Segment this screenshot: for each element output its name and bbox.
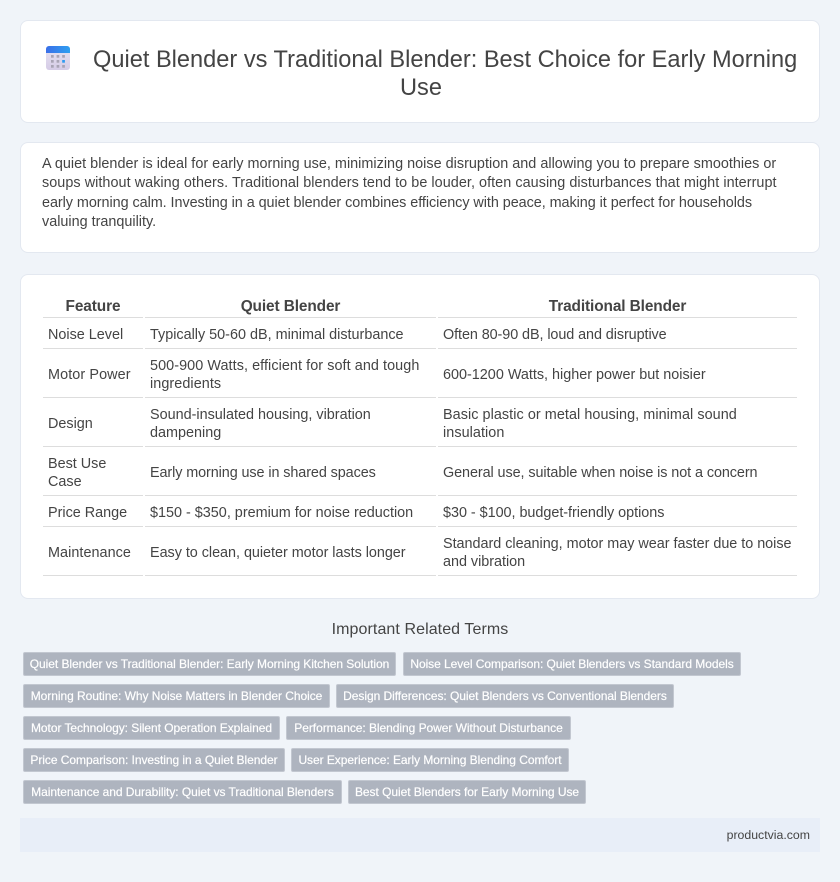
tags: related terms: Quiet Blender vs Traditional Blender: Early Morning Kitchen Solution xyxy=(30,657,389,671)
text block: description: valuing tranquility. xyxy=(42,214,156,230)
title: Use xyxy=(400,75,442,101)
row: price range: $30 - $100, budget-friendly options xyxy=(443,505,664,521)
row: best use case: General use, suitable when noise is not a concern xyxy=(443,465,757,481)
panel: comparison table xyxy=(20,274,820,599)
row: design: insulation xyxy=(443,425,504,441)
tags: related terms: Design Differences: Quiet Blenders vs Conventional Blenders xyxy=(343,689,667,703)
tags: related terms: Price Comparison: Investing in a Quiet Blender xyxy=(30,753,278,767)
row: best use case xyxy=(48,456,757,490)
heading: related terms: Important Related Terms xyxy=(332,621,508,638)
row: noise level xyxy=(48,327,667,343)
table header xyxy=(66,298,686,315)
row: design: Sound-insulated housing, vibration xyxy=(150,407,371,423)
table header: Quiet Blender xyxy=(241,298,340,315)
text block: description: early morning calm. Investing in a quiet blender combines efficiency with peace, making it perfect for households xyxy=(42,195,752,211)
row: best use case: Early morning use in shared spaces xyxy=(150,465,376,481)
row: design: Design xyxy=(48,416,93,432)
row: price range xyxy=(48,505,664,521)
footer source text: productvia.com xyxy=(727,828,810,842)
tags: related terms: Noise Level Comparison: Quiet Blenders vs Standard Models xyxy=(410,657,734,671)
row: maintenance xyxy=(48,536,792,570)
row: best use case: Best Use xyxy=(48,456,106,472)
row: maintenance: Maintenance xyxy=(48,545,131,561)
tags: related terms: User Experience: Early Morning Blending Comfort xyxy=(298,753,562,767)
row: maintenance: and vibration xyxy=(443,554,525,570)
row: design: Basic plastic or metal housing, minimal sound xyxy=(443,407,737,423)
tags: related terms: Motor Technology: Silent Operation Explained xyxy=(31,721,272,735)
row: design: dampening xyxy=(150,425,221,441)
tags: related terms xyxy=(23,652,741,804)
text block: description: soups without waking others. Traditional blenders tend to be louder, often causing disturbances that might interrupt xyxy=(42,175,777,191)
title: Quiet Blender vs Traditional Blender: Best Choice for Early Morning xyxy=(93,47,797,73)
table header: Traditional Blender xyxy=(549,298,686,315)
title xyxy=(93,47,797,101)
row: motor power: Motor Power xyxy=(48,367,131,383)
row: noise level: Typically 50-60 dB, minimal disturbance xyxy=(150,327,404,343)
row: noise level: Often 80-90 dB, loud and disruptive xyxy=(443,327,667,343)
row: maintenance: Easy to clean, quieter motor lasts longer xyxy=(150,545,406,561)
panel: description xyxy=(20,142,820,253)
row: motor power: 500-900 Watts, efficient for soft and tough xyxy=(150,358,419,374)
table rules xyxy=(43,317,797,576)
row: best use case: Case xyxy=(48,474,82,490)
row: maintenance: Standard cleaning, motor may wear faster due to noise xyxy=(443,536,792,552)
text block: description: A quiet blender is ideal for early morning use, minimizing noise disruption and allowing you to prepare smoothies or xyxy=(42,156,776,172)
tags: related terms: Morning Routine: Why Noise Matters in Blender Choice xyxy=(31,689,322,703)
table header: Feature xyxy=(66,298,120,315)
row: design xyxy=(48,407,737,441)
row: motor power: ingredients xyxy=(150,376,221,392)
row: motor power: 600-1200 Watts, higher power but noisier xyxy=(443,367,706,383)
row: motor power xyxy=(48,358,706,392)
row: noise level: Noise Level xyxy=(48,327,123,343)
tags: related terms: Maintenance and Durability: Quiet vs Traditional Blenders xyxy=(31,785,334,799)
text block: description xyxy=(42,156,777,230)
row: price range: Price Range xyxy=(48,505,127,521)
icon: calendar grid xyxy=(46,46,70,70)
tags: related terms: Best Quiet Blenders for Early Morning Use xyxy=(355,785,579,799)
row: price range: $150 - $350, premium for noise reduction xyxy=(150,505,413,521)
panel: title card xyxy=(20,20,820,123)
footer bar xyxy=(20,818,820,852)
tags: related terms: Performance: Blending Power Without Disturbance xyxy=(294,721,563,735)
